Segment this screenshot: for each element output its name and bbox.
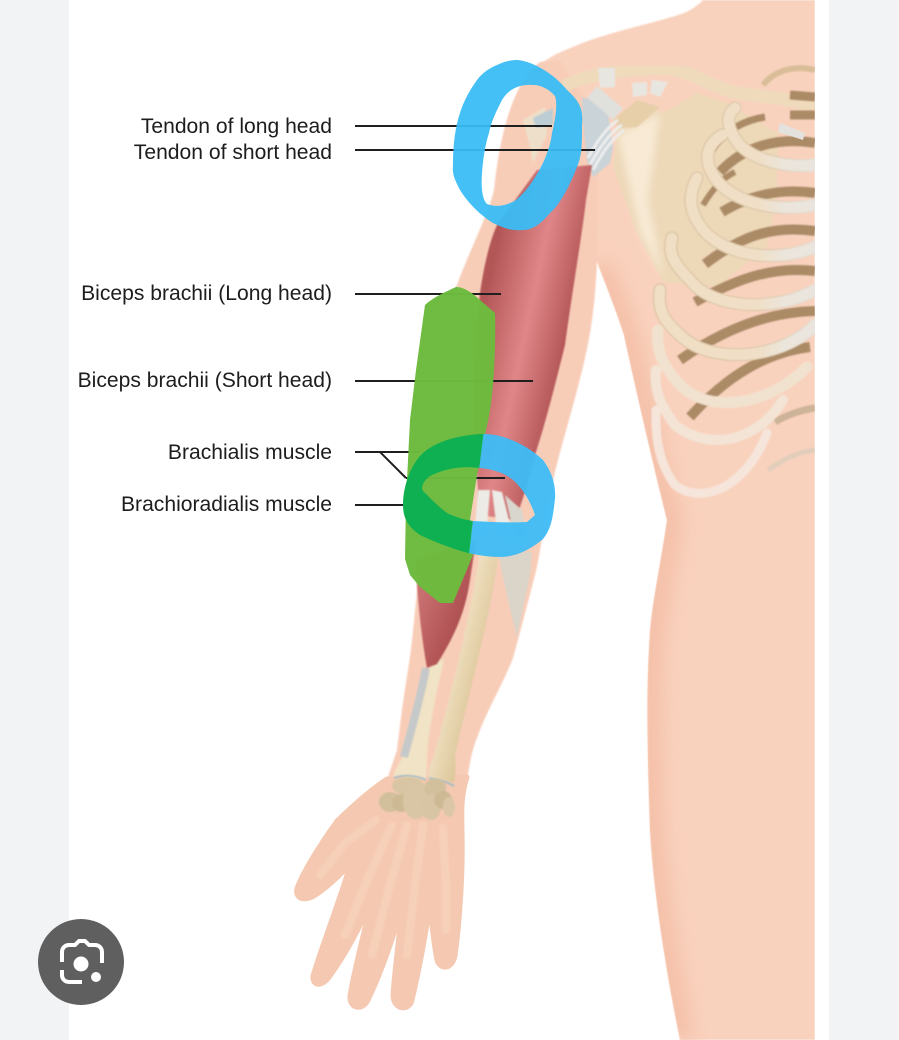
label: biceps brachii long head: Biceps brachii (Long head)	[81, 282, 332, 305]
green brush area	[405, 287, 495, 603]
back ribs	[680, 68, 815, 470]
front ribs	[656, 108, 815, 493]
label: tendon of long head: Tendon of long head	[141, 115, 332, 138]
label: brachialis muscle: Brachialis muscle	[168, 441, 332, 464]
leader lines	[355, 126, 595, 505]
hand skin	[297, 777, 467, 1008]
forearm muscle	[416, 554, 475, 668]
label: biceps brachii short head: Biceps brachii (Short head)	[78, 369, 332, 392]
anatomical illustration	[297, 0, 815, 1040]
elbow ring blue half	[469, 434, 556, 557]
biceps muscle	[474, 165, 592, 520]
front rib outlines	[659, 108, 815, 355]
torso edge shading	[600, 265, 682, 1040]
coracoid	[613, 100, 660, 128]
forearm bones	[393, 550, 499, 786]
carpal bones	[379, 777, 455, 820]
arm skin	[387, 60, 600, 780]
clavicle	[568, 68, 815, 108]
elbow ring highlight	[403, 434, 555, 557]
scapula	[613, 93, 778, 287]
scapula light ridge	[618, 113, 664, 278]
forearm tendon group	[498, 550, 532, 637]
icon: lens camera button	[38, 919, 124, 1005]
rib cartilage	[778, 123, 805, 140]
label: tendon of short head: Tendon of short head	[134, 141, 332, 164]
biceps lower tendons	[475, 489, 525, 522]
shoulder joint and tendons	[523, 68, 668, 177]
elbow ring green half	[403, 434, 484, 554]
hand bones	[320, 820, 446, 955]
torso and shoulder skin	[520, 0, 815, 1040]
label: brachioradialis muscle: Brachioradialis muscle	[121, 493, 332, 516]
blue shoulder ring highlight	[453, 60, 582, 230]
